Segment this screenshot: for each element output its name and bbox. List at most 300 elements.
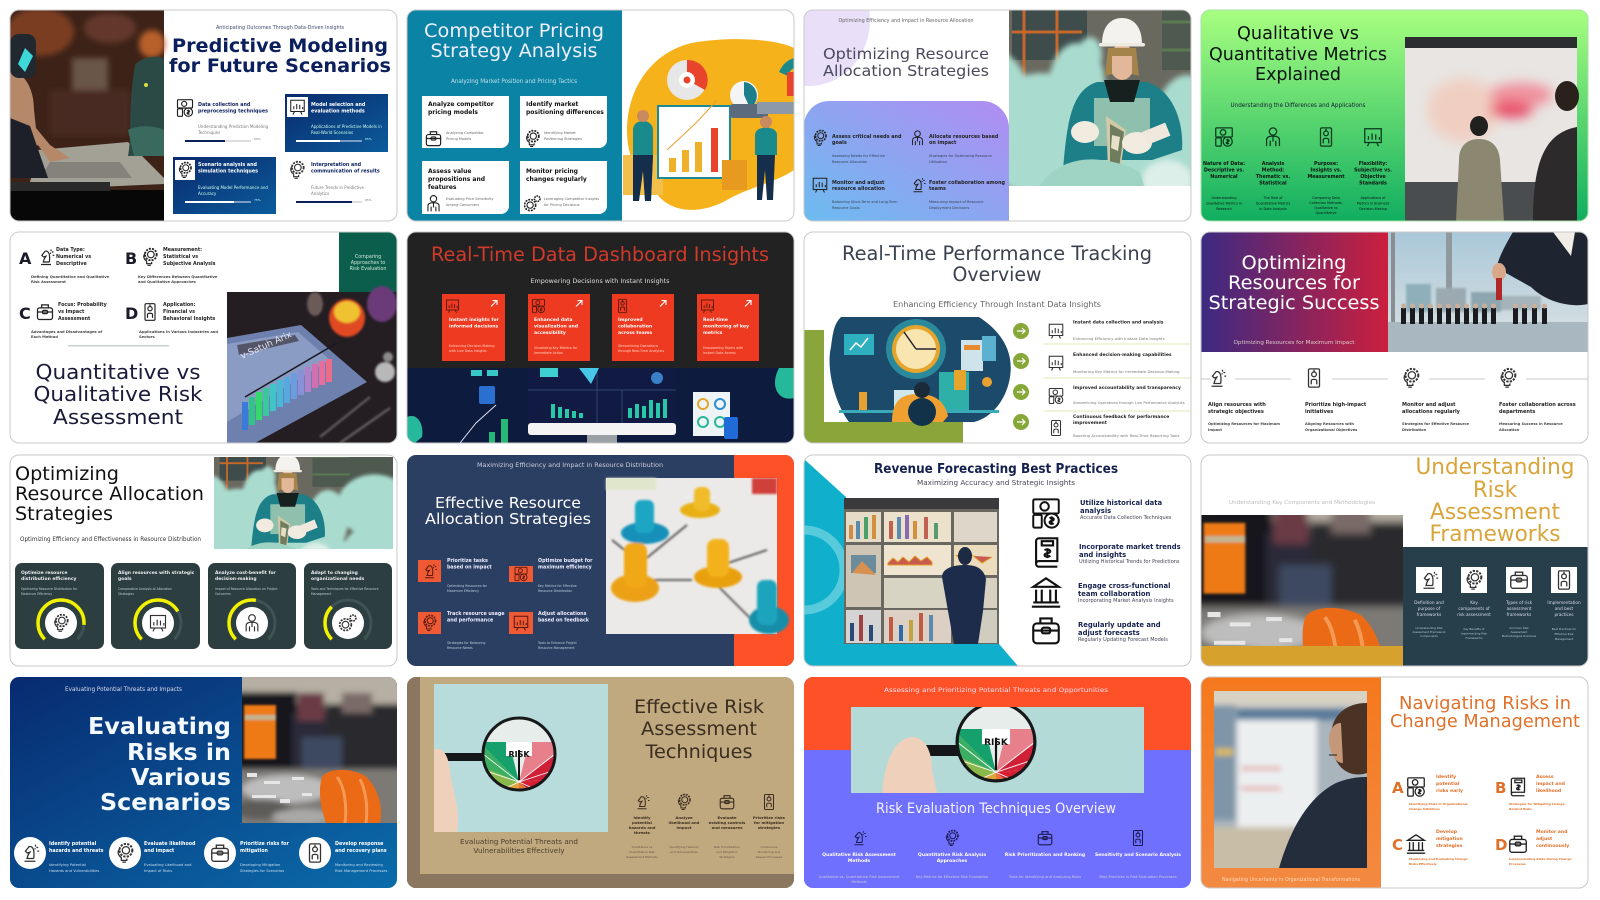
card 9: resource allocation with gauges xyxy=(10,450,418,666)
green L-shape xyxy=(804,330,963,443)
column: evaluate: and Mitigation xyxy=(716,850,738,854)
item: response plans: and recovery plans xyxy=(335,848,387,854)
item: foster collaboration: Deployment Decisions xyxy=(929,206,969,210)
item: identify hazards: Hazards and Vulnerabilities xyxy=(49,869,99,873)
title: Overview xyxy=(952,263,1042,286)
item: update forecasts: adjust forecasts xyxy=(1078,629,1140,637)
gauge card 1 xyxy=(15,563,104,656)
column: types: Common Risk xyxy=(1509,626,1529,630)
title: Effective Resource xyxy=(435,494,581,512)
column: nature of data xyxy=(1203,128,1245,211)
card 12: risk assessment frameworks slide xyxy=(1188,455,1588,685)
title: Evaluating xyxy=(88,714,231,740)
box: value propositions: Among Consumers xyxy=(446,203,479,207)
subtitle: Maximizing Accuracy and Strategic Insights xyxy=(917,479,1075,487)
column: implementation: Management xyxy=(1555,637,1574,641)
title: for Future Scenarios xyxy=(169,55,391,77)
item: identify hazards: Identifying Potential xyxy=(49,863,86,867)
gauge card 4 xyxy=(304,563,392,656)
column: key components: Key Benefits of xyxy=(1464,627,1486,631)
dark panel xyxy=(1403,547,1588,666)
subtitle: Assessing and Prioritizing Potential Threats and Opportunities xyxy=(884,686,1109,694)
title: Assessment xyxy=(641,718,757,740)
caption: Vulnerabilities Effectively xyxy=(474,847,565,855)
photo: tablet with rainbow chart: v-Satuh Arix xyxy=(239,330,294,362)
red card 3: across teams xyxy=(618,330,653,336)
item C: Develop xyxy=(1436,829,1458,835)
column: analyze: Identifying Hazards xyxy=(669,845,699,849)
item A: Identifying Risks in Organizational xyxy=(1409,802,1468,806)
subtitle: Analyzing Market Position and Pricing Tactics xyxy=(451,79,577,85)
column: sensitivity: Best Practices in Risk Evaluation Processes xyxy=(1099,875,1177,879)
item: prioritize tasks: Prioritize tasks xyxy=(447,558,488,564)
photo: hand with magnifier xyxy=(851,703,1144,793)
item C: vs Impact xyxy=(58,309,85,315)
box: monitor changes: for Pricing Decisions xyxy=(544,203,580,207)
box: analyze models xyxy=(422,96,509,148)
green gradient background xyxy=(1201,10,1588,221)
subtitle: Optimizing Resources for Maximum Impact xyxy=(1234,340,1355,346)
item: adjust allocations xyxy=(509,611,590,650)
gauge card 3: Analyze cost-benefit for xyxy=(215,570,277,576)
item C: mitigation xyxy=(1436,836,1463,842)
red card 2 xyxy=(528,294,590,361)
title: Real-Time Performance Tracking xyxy=(842,242,1152,265)
item D: Monitor and xyxy=(1536,829,1567,835)
item C: Each Method xyxy=(31,335,58,339)
column: purpose: Insights vs. xyxy=(1310,168,1342,174)
column: prioritize initiatives: initiatives xyxy=(1305,409,1333,415)
title: Optimizing xyxy=(1242,252,1346,274)
column: analyze: Analyze xyxy=(675,815,693,820)
item B: Subjective Analysis xyxy=(163,261,216,267)
item: historical data: analysis xyxy=(1080,507,1111,515)
column: qualitative methods: Qualitative Risk Assessment xyxy=(822,852,897,858)
icon strip line xyxy=(1201,378,1588,380)
feature box: scenario analysis: Evaluating Model Performance and xyxy=(198,185,268,190)
item D: adjust xyxy=(1536,836,1553,842)
column: implementation: Implementation xyxy=(1547,600,1581,605)
column: implementation: Best Practices for xyxy=(1552,627,1577,631)
photo: worker xyxy=(1009,10,1190,186)
column: align resources: Align resources with xyxy=(1208,402,1266,408)
title: Strategy Analysis xyxy=(430,40,598,62)
box: value propositions: Assess value xyxy=(428,168,471,175)
item: track usage xyxy=(418,611,505,650)
feature box: data collection: preprocessing techniques xyxy=(198,108,268,114)
item: allocate resources xyxy=(913,131,999,164)
item D: Behavioral Insights xyxy=(163,316,215,322)
column: identify: threats xyxy=(634,830,651,835)
column: definition: purpose of xyxy=(1418,606,1441,611)
item: historical data xyxy=(1033,499,1172,528)
column: identify: Qualitative vs xyxy=(632,845,653,849)
box: positioning: Positioning Strategies xyxy=(544,137,582,141)
title xyxy=(425,23,602,61)
item: allocate resources: Strategies for Optimizing Resource xyxy=(929,154,992,158)
card 4: qualitative vs quantitative metrics slide xyxy=(1201,10,1588,221)
column: analysis method xyxy=(1256,128,1290,211)
item: evaluate likelihood xyxy=(109,837,196,873)
column: monitor allocations: Distribution xyxy=(1402,428,1427,432)
gauge card 4: Adapt to changing xyxy=(311,570,358,576)
list item 3 xyxy=(1049,385,1185,405)
gauge card 3: Outcomes xyxy=(215,592,231,596)
red card 4: Real-time xyxy=(703,317,728,323)
title: Change Management xyxy=(1390,712,1580,732)
title: Scenarios xyxy=(100,790,231,816)
title: Resource Allocation xyxy=(15,483,204,505)
column: purpose: Collection Methods: xyxy=(1309,201,1343,205)
column: flexibility: Objective xyxy=(1360,174,1387,180)
title xyxy=(634,696,764,763)
item: monitor allocation: Resource Goals xyxy=(832,206,860,210)
feature box: interpretation: Interpretation and xyxy=(311,162,362,168)
item: track usage: Track resource usage xyxy=(447,611,505,617)
item: allocate resources: Allocate resources based xyxy=(929,134,999,140)
item D: Processes xyxy=(1509,862,1526,866)
list item 1: Instant data collection and analysis xyxy=(1073,320,1164,326)
column: flexibility xyxy=(1354,129,1392,211)
red card 1: informed decisions xyxy=(449,324,498,330)
item B: Related Risks xyxy=(1509,807,1532,811)
column: implementation: Effective Risk xyxy=(1555,632,1574,636)
column: flexibility: Flexibility: xyxy=(1359,161,1387,167)
subtitle: Evaluating Potential Threats and Impacts xyxy=(65,687,182,693)
item D: Sectors xyxy=(139,335,155,339)
gauge card 4: organizational needs xyxy=(311,576,365,582)
title xyxy=(1208,252,1380,314)
title: Revenue Forecasting Best Practices xyxy=(874,462,1118,477)
item: historical data: Accurate Data Collection Techniques xyxy=(1080,515,1172,521)
item: adjust allocations: Tools to Enhance Project xyxy=(537,641,577,645)
title xyxy=(425,494,591,528)
item D: Applications in Various Industries and xyxy=(139,330,218,334)
red card 2: visualization and xyxy=(534,324,578,330)
title: Navigating Risks in xyxy=(1399,694,1571,714)
column: types: Methodologies Overview xyxy=(1502,634,1537,638)
column: analysis method: Method: xyxy=(1262,168,1284,174)
card 15: risk evaluation techniques slide xyxy=(804,677,1191,888)
item: assess needs xyxy=(814,130,902,164)
green corner panel: Risk Evaluation xyxy=(350,266,386,272)
title xyxy=(88,714,231,816)
arrow bullet 3 xyxy=(1013,384,1029,400)
feature box: scenario analysis: Scenario analysis and xyxy=(198,162,258,168)
item D: Financial vs xyxy=(163,309,195,315)
feature box: interpretation: 85% xyxy=(365,198,372,202)
list item 2 xyxy=(1049,352,1180,374)
title: Explained xyxy=(1255,65,1341,85)
card 11: revenue forecasting slide xyxy=(764,455,1191,666)
item: update forecasts xyxy=(1033,618,1168,643)
subtitle: Enhancing Efficiency Through Instant Data Insights xyxy=(893,300,1101,309)
card 10: effective resource allocation slide xyxy=(407,455,794,666)
column: flexibility: Decision-Making xyxy=(1359,207,1387,211)
subtitle: Understanding the Differences and Applications xyxy=(1230,103,1366,109)
box: positioning xyxy=(520,96,607,148)
card 13: evaluating risks slide xyxy=(10,672,402,888)
column: purpose: Comparing Data xyxy=(1312,196,1340,200)
red card 3: Improved xyxy=(618,317,643,323)
item A xyxy=(19,247,110,284)
illustration: clock and worker xyxy=(830,317,1011,426)
item C: C xyxy=(1392,836,1403,854)
title xyxy=(1416,455,1574,547)
item: optimize budget xyxy=(509,558,593,593)
column: analyze: impact xyxy=(677,825,692,830)
column: prioritize: strategies xyxy=(758,825,781,830)
item: assess needs: Assess critical needs and xyxy=(832,134,902,140)
column: evaluate: Evaluate xyxy=(717,815,737,820)
column: prioritization xyxy=(1005,832,1085,879)
column: definition: Definition and xyxy=(1414,600,1444,605)
feature box: interpretation: communication of results xyxy=(311,168,380,174)
column: prioritize: Review Processes xyxy=(756,855,783,859)
list item 3: Improved accountability and transparency xyxy=(1073,385,1181,391)
feature box: scenario analysis: 75% xyxy=(254,198,261,202)
feature box: model selection xyxy=(285,94,388,152)
item D: D xyxy=(1495,836,1507,854)
column: foster collaboration: Measuring Success in Resource xyxy=(1499,422,1563,426)
red card 1 xyxy=(442,294,505,361)
item: prioritize risks: Developing Mitigation xyxy=(240,863,281,867)
list item 4: improvement xyxy=(1073,420,1108,426)
item D: D xyxy=(125,304,138,323)
caption: Navigating Uncertainty in Organizational Transformations xyxy=(1222,877,1360,883)
column: align resources: strategic objectives xyxy=(1208,409,1264,415)
feature box: data collection: Understanding Prediction Modeling xyxy=(198,124,269,129)
column: prioritization: Risk Prioritization and Ranking xyxy=(1005,852,1085,858)
column: foster collaboration: departments xyxy=(1499,409,1535,415)
item B: Statistical vs xyxy=(163,254,198,260)
card 2: competitor pricing slide xyxy=(407,10,794,221)
feature box: scenario analysis: Accuracy xyxy=(198,191,217,196)
title: Effective Risk xyxy=(634,696,764,718)
title xyxy=(169,38,390,72)
teal panel xyxy=(407,10,622,221)
subtitle: Anticipating Outcomes Through Data-Driven Insights xyxy=(216,25,344,31)
column: prioritize: Monitoring and xyxy=(758,850,780,854)
item: team collaboration xyxy=(1032,578,1174,607)
arrow bullet 1 xyxy=(1013,323,1029,339)
column: monitor allocations xyxy=(1402,369,1470,432)
item A: Descriptive xyxy=(56,261,87,267)
navy background xyxy=(407,455,794,666)
gradient panel xyxy=(804,101,1009,221)
item: response plans: Risk Management Processes xyxy=(335,869,388,873)
column: purpose: Purpose: xyxy=(1314,161,1338,167)
red card 1: Enhancing Decision-Making xyxy=(449,344,494,348)
gauge card 2: Comparative Analysis of Allocation xyxy=(118,587,172,591)
title: Real-Time Data Dashboard Insights xyxy=(431,243,769,266)
column: prioritize initiatives: Organizational Objectives xyxy=(1305,428,1357,432)
item C: Risks Effectively xyxy=(1409,862,1437,866)
item: historical data: Utilize historical data xyxy=(1080,499,1163,507)
item: monitor allocation: resource allocation xyxy=(832,186,885,192)
list item 4: Boosting Accountability with Real-Time Reporting Tools xyxy=(1073,433,1180,438)
item: adjust allocations: based on feedback xyxy=(538,618,590,624)
box: analyze models: Pricing Models xyxy=(446,137,471,141)
column: evaluate: and measures xyxy=(712,825,743,830)
green corner panel: Approaches to xyxy=(351,260,385,266)
gauge card 1: Maximum Efficiency xyxy=(21,592,52,596)
column: monitor allocations: allocations regularly xyxy=(1402,409,1461,415)
photo: hand with magnifier: RISK xyxy=(984,738,1009,748)
title: Resources for xyxy=(1228,272,1360,294)
column: prioritize initiatives xyxy=(1305,369,1367,432)
column: flexibility: Metrics in Business xyxy=(1357,202,1389,206)
item: foster collaboration xyxy=(914,178,1005,210)
item A: risks early xyxy=(1436,788,1463,794)
photo: men viewing heatmap xyxy=(1405,37,1579,221)
column: definition: Components xyxy=(1420,634,1438,638)
title: Frameworks xyxy=(1430,522,1560,547)
red card 2: Enhanced data xyxy=(534,317,572,323)
photo: blurred vest scene xyxy=(242,677,397,823)
item: track usage: and performance xyxy=(447,618,494,624)
item: update forecasts: Regularly Updating Forecast Models xyxy=(1078,637,1168,643)
item D: Application: xyxy=(163,302,196,308)
item B xyxy=(125,247,218,284)
red card 2: Immediate Action xyxy=(534,351,563,355)
box: value propositions xyxy=(422,161,509,214)
item C xyxy=(1392,829,1468,866)
card 6: real-time dashboard slide xyxy=(407,232,794,443)
red card 2: Visualizing Key Metrics for xyxy=(534,346,578,350)
photo: analyst at screens xyxy=(1214,691,1367,868)
column: definition: Understanding Risk xyxy=(1415,626,1443,630)
column: prioritize: Continuous xyxy=(761,845,778,849)
subtitle: Optimizing Efficiency and Impact in Resource Allocation xyxy=(838,18,974,24)
column: key components: components of xyxy=(1458,606,1490,611)
item: optimize budget: Resource Distribution xyxy=(538,589,572,593)
dark header panel xyxy=(407,232,794,368)
feature box: data collection: Techniques xyxy=(197,130,220,135)
column: types: Types of risk xyxy=(1505,600,1533,605)
item: foster collaboration: Measuring Impact of Resource xyxy=(929,200,984,204)
item: team collaboration: team collaboration xyxy=(1078,590,1151,598)
gold bar xyxy=(1201,646,1403,666)
card 1: predictive modeling slide xyxy=(6,8,397,221)
photo: man viewing charts xyxy=(844,498,999,644)
column: types: frameworks xyxy=(1507,612,1531,617)
item A: Risk Assessment xyxy=(31,280,66,284)
title: Competitor Pricing xyxy=(424,20,604,42)
item C: Focus: Probability xyxy=(58,302,108,308)
title xyxy=(1390,694,1580,732)
left band xyxy=(407,677,420,888)
feature box: data collection: Data collection and xyxy=(198,102,251,108)
column: analysis method: Thematic vs. xyxy=(1256,174,1290,180)
item A: Defining Quantitative and Qualitative xyxy=(31,275,110,279)
red card 3 xyxy=(612,294,674,361)
column: identify: Assessment Methods xyxy=(626,855,658,859)
title: Allocation Strategies xyxy=(823,62,989,80)
gauge card 2: Strategies xyxy=(118,592,134,596)
list item 1 xyxy=(1049,320,1165,341)
red card 3: Streamlining Operations xyxy=(618,344,658,348)
column: align resources xyxy=(1208,370,1280,432)
item: identify hazards: hazards and threats xyxy=(49,848,104,854)
gauge card 1: Optimize resource xyxy=(21,570,67,576)
red card 4: Instant Data Access xyxy=(703,351,736,355)
column: types: assessment xyxy=(1507,606,1532,611)
photo: magnifier with risk gauge xyxy=(434,684,608,832)
item: prioritize risks xyxy=(204,837,289,873)
column: qualitative methods: Qualitative vs. Quantitative Risk Assessment xyxy=(819,875,900,879)
feature box: interpretation xyxy=(290,160,380,203)
column: sensitivity: Sensitivity and Scenario Analysis xyxy=(1095,852,1181,858)
title xyxy=(823,48,988,79)
column: quantitative approaches xyxy=(916,830,988,879)
item: foster collaboration: Foster collaboration among xyxy=(929,180,1005,186)
column: qualitative methods: Methods xyxy=(851,880,867,884)
item: prioritize tasks xyxy=(418,558,492,593)
column: identify: potential xyxy=(632,820,652,825)
feature box: model selection: Real-World Scenarios xyxy=(311,130,353,135)
list item 4: Continuous feedback for performance xyxy=(1073,414,1169,420)
column: prioritize: Prioritize risks xyxy=(753,815,786,820)
item: monitor allocation: Balancing Short-Term and Long-Term xyxy=(832,200,898,204)
list item 3: Streamlining Operations through Live Performance Analytics xyxy=(1073,401,1185,405)
title: Qualitative vs xyxy=(1237,24,1359,44)
card 5: quantitative vs qualitative risk slide xyxy=(10,232,397,443)
red card 1: with Live Data Insights xyxy=(449,349,487,353)
caption: Evaluating Potential Threats and xyxy=(460,838,578,846)
green corner panel: Comparing xyxy=(355,254,381,260)
title: Risk xyxy=(1473,478,1517,503)
red card 1: Instant insights for xyxy=(449,317,499,323)
column: evaluate xyxy=(709,796,746,859)
item: optimize budget: Optimize budget for xyxy=(538,558,593,564)
column: analyze xyxy=(669,794,700,854)
column: analysis method: Quantitative Metrics xyxy=(1256,202,1290,206)
column: purpose: Measurement xyxy=(1307,174,1345,180)
list item 2: Monitoring Key Metrics for Immediate Decision-Making xyxy=(1073,369,1180,374)
title: Assessment xyxy=(53,405,183,429)
box: positioning: Identify market xyxy=(526,101,579,108)
item: evaluate likelihood: and impact xyxy=(144,848,175,854)
item A: Data Type: xyxy=(56,247,85,253)
feature box: model selection: Model selection and xyxy=(311,102,366,108)
item D xyxy=(1495,829,1572,866)
item: response plans: Monitoring and Reviewing xyxy=(335,863,383,867)
column: prioritize: for mitigation xyxy=(754,820,784,825)
item: identify hazards xyxy=(14,837,104,873)
column: quantitative approaches: Quantitative Risk Analysis xyxy=(918,852,986,858)
item C: C xyxy=(19,304,31,323)
item B: B xyxy=(1495,779,1506,797)
gauge card 2: goals xyxy=(118,576,132,582)
column: nature of data: Research xyxy=(1216,207,1232,211)
photo: magnifier with risk gauge: RISK xyxy=(508,750,530,759)
column: align resources: Optimizing Resources for Maximum xyxy=(1208,422,1280,426)
item A: Numerical vs xyxy=(56,254,91,260)
item: team collaboration: Engage cross-functional xyxy=(1078,582,1170,590)
title: Strategic Success xyxy=(1208,292,1380,314)
title: Allocation Strategies xyxy=(425,510,591,528)
item A: Change Initiatives xyxy=(1409,807,1440,811)
item: market trends xyxy=(1036,538,1181,567)
column: prioritize initiatives: Prioritize high-impact xyxy=(1305,402,1367,408)
item C: Monitoring and Evaluating Change xyxy=(1409,857,1468,861)
item: response plans xyxy=(299,837,388,873)
item: assess needs: goals xyxy=(832,140,847,146)
column: flexibility: Standards xyxy=(1359,180,1387,186)
item: monitor allocation xyxy=(813,178,898,210)
arrow bullet 2 xyxy=(1013,353,1029,369)
